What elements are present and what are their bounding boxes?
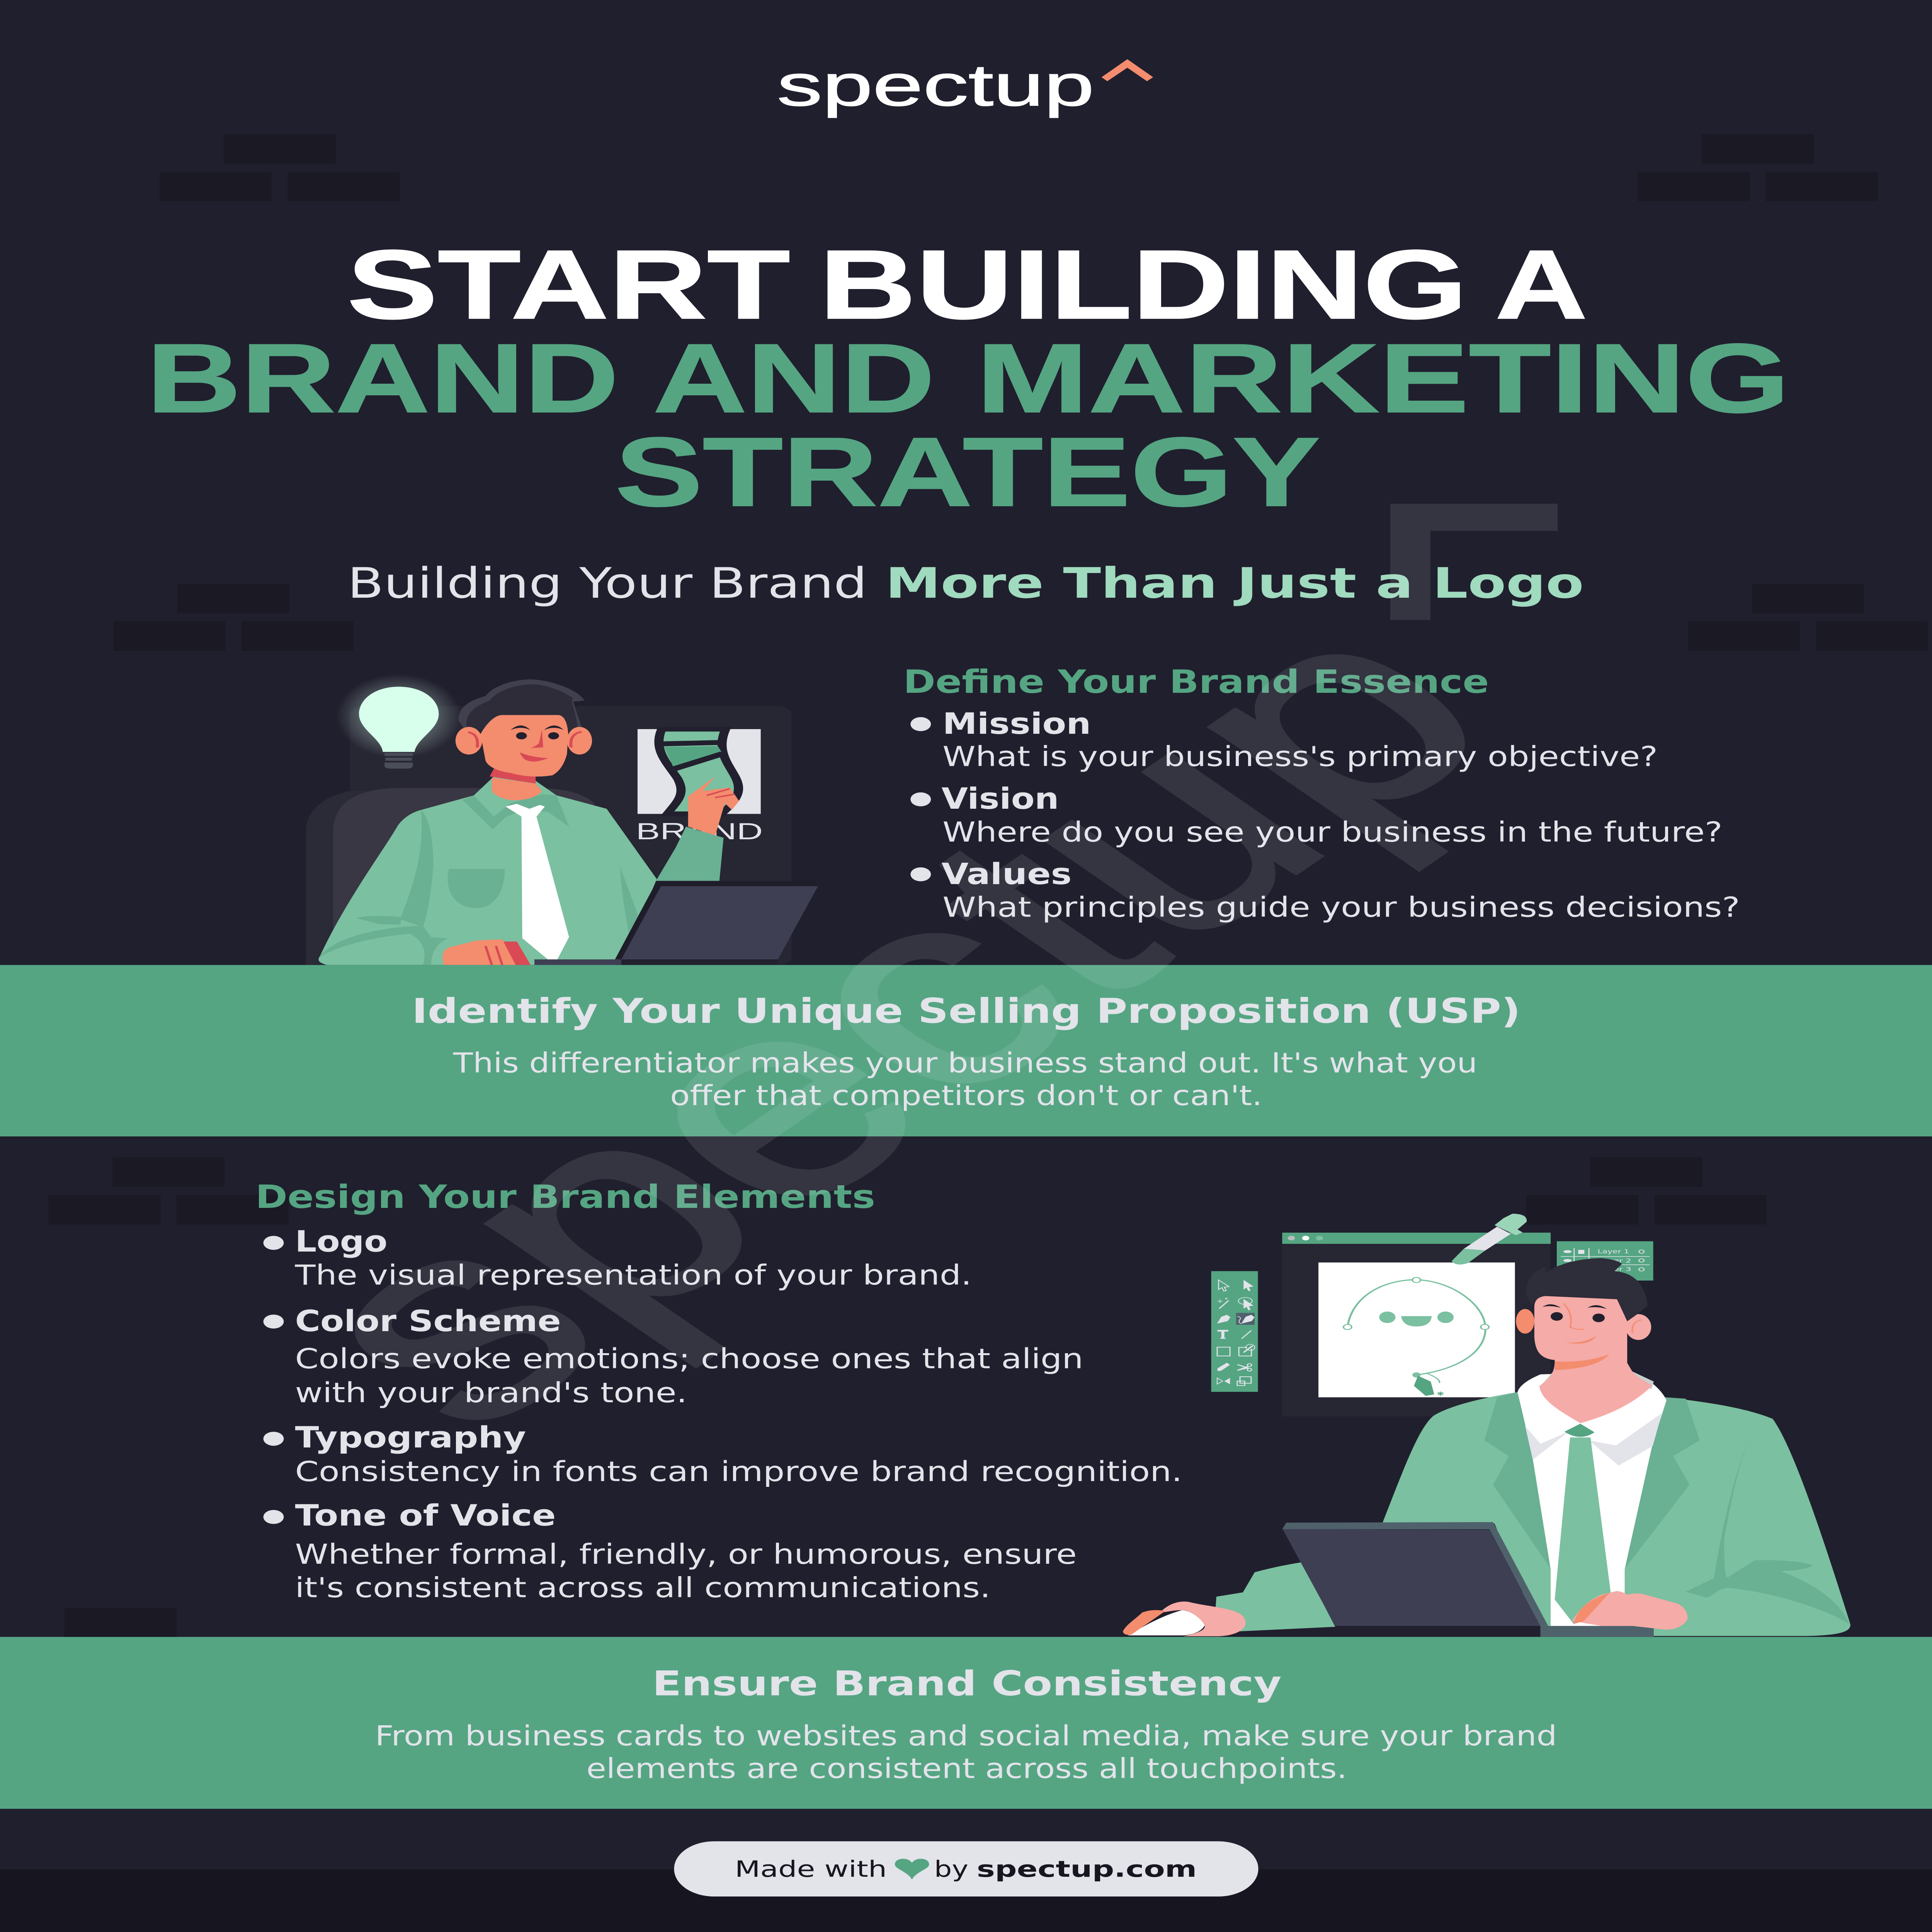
item: mission xyxy=(910,707,1658,772)
footer pill: by xyxy=(934,1856,968,1883)
logo: spectup: spectup xyxy=(777,53,1094,118)
item: vision: Vision xyxy=(941,782,1059,816)
panel: unique selling proposition: Identify Your Unique Selling Proposition (USP) xyxy=(412,991,1520,1031)
chair xyxy=(306,788,594,965)
footer pill: spectup.com xyxy=(977,1856,1197,1883)
item: logo xyxy=(264,1225,972,1291)
hand on mouse xyxy=(1123,1602,1246,1636)
panel: ensure brand consistency: From business cards to websites and social media, make sure your brand xyxy=(375,1720,1557,1752)
footer pill xyxy=(674,1841,1258,1896)
title: A xyxy=(1495,230,1587,339)
title: STRATEGY xyxy=(615,417,1320,527)
icon: light bulb xyxy=(336,674,461,769)
watermark: spectup: spectup xyxy=(214,554,1567,1483)
item: values xyxy=(910,857,1740,923)
shirt and collar xyxy=(1517,1371,1667,1627)
raised arm and hand xyxy=(656,776,739,881)
item: mission: Mission xyxy=(942,707,1091,741)
text block: Design Your Brand Elements xyxy=(255,1179,1182,1604)
illustration: man presenting brand xyxy=(306,674,818,965)
layers panel xyxy=(1557,1241,1653,1281)
panel: unique selling proposition xyxy=(0,965,1932,1136)
laptop xyxy=(1282,1522,1654,1637)
item: typography: Typography xyxy=(295,1420,526,1455)
heading: Design Your Brand Elements xyxy=(255,1179,875,1216)
subtitle xyxy=(347,559,1584,607)
item: tone of voice: Tone of Voice xyxy=(295,1498,556,1532)
panel: ensure brand consistency xyxy=(0,1637,1932,1809)
title: START xyxy=(347,230,790,339)
item: color scheme: Color Scheme xyxy=(295,1304,561,1338)
icon: heart xyxy=(895,1859,929,1879)
item: typography xyxy=(264,1420,1182,1488)
shirt xyxy=(318,776,657,965)
item: tone of voice: it's consistent across all communications. xyxy=(295,1572,991,1604)
design window xyxy=(1282,1233,1551,1417)
panel: ensure brand consistency: elements are consistent across all touchpoints. xyxy=(587,1753,1347,1784)
panel: ensure brand consistency: Ensure Brand Consistency xyxy=(652,1664,1282,1703)
lower hand xyxy=(442,939,531,965)
brand board xyxy=(350,706,792,965)
tie xyxy=(505,804,569,965)
jacket xyxy=(1214,1392,1850,1636)
hand on keyboard xyxy=(1572,1591,1687,1630)
panel: unique selling proposition: offer that competitors don't or can't. xyxy=(670,1080,1262,1112)
item: logo: The visual representation of your brand. xyxy=(295,1259,972,1291)
panel: unique selling proposition: This differentiator makes your business stand out. It's what you xyxy=(453,1047,1477,1079)
item: color scheme: Colors evoke emotions; choose ones that align xyxy=(295,1343,1083,1375)
item: mission: What is your business's primary objective? xyxy=(942,741,1658,772)
artboard with vector smiley xyxy=(1318,1262,1515,1397)
title: BRAND xyxy=(146,323,619,433)
heading: Define Your Brand Essence xyxy=(903,663,1489,701)
item: values: Values xyxy=(941,857,1071,891)
brand logo on board xyxy=(636,729,763,845)
eyedropper xyxy=(1452,1214,1527,1265)
item: vision: Where do you see your business in the future? xyxy=(942,816,1723,848)
item: vision xyxy=(910,782,1723,848)
item: typography: Consistency in fonts can improve brand recognition. xyxy=(295,1456,1182,1488)
layers panel: Layer 2 xyxy=(1598,1257,1631,1264)
layers panel: Layer 3 xyxy=(1598,1266,1631,1272)
laptop xyxy=(534,881,818,965)
item: tone of voice: Whether formal, friendly, or humorous, ensure xyxy=(295,1538,1077,1570)
title: BUILDING xyxy=(819,230,1468,339)
brand logo on board: BRAND xyxy=(636,818,763,845)
layers panel: Layer 1 xyxy=(1598,1248,1629,1255)
item: values: What principles guide your business decisions? xyxy=(942,891,1740,923)
footer pill: Made with xyxy=(735,1856,887,1883)
illustration: designer at laptop xyxy=(1123,1214,1850,1637)
subtitle: Building Your Brand xyxy=(347,559,867,607)
icon: tool palette xyxy=(1211,1271,1258,1392)
title xyxy=(146,230,1790,527)
head xyxy=(1516,1258,1652,1423)
item: logo: Logo xyxy=(295,1225,388,1259)
item: color scheme xyxy=(264,1304,1083,1409)
tie xyxy=(1555,1424,1611,1624)
item: tone of voice xyxy=(264,1498,1077,1604)
item: color scheme: with your brand's tone. xyxy=(295,1377,687,1409)
title: AND xyxy=(653,323,935,433)
head xyxy=(456,679,592,800)
text block: Define Your Brand Essence xyxy=(903,663,1740,923)
title: MARKETING xyxy=(976,323,1790,433)
subtitle: More Than Just a Logo xyxy=(885,559,1584,607)
